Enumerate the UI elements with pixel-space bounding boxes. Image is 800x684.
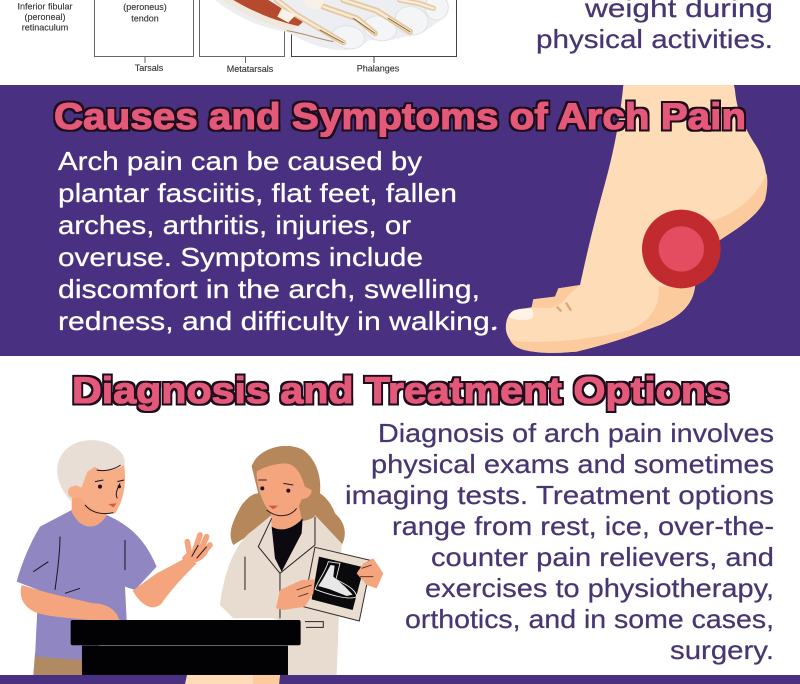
diagram label: tendon: (peroneus) (123, 2, 167, 12)
small white dot (494, 326, 496, 330)
anatomy diagram: foot bones (17, 0, 456, 74)
text block: causes and symptoms (58, 146, 498, 336)
diagram label: retinaculum: retinaculum (22, 22, 68, 32)
text block: causes and symptoms: redness, and difficulty in walking. (58, 306, 498, 336)
doctor figure (220, 446, 383, 675)
text block: diagnosis and treatment: exercises to physiotherapy, (425, 573, 774, 603)
text block: causes and symptoms: Arch pain can be caused by (58, 146, 422, 176)
text block: diagnosis and treatment: surgery. (670, 635, 774, 665)
text block: arch function (end): physical activities. (536, 24, 773, 54)
black redaction block (71, 620, 301, 675)
panel: causes and symptoms (0, 85, 800, 356)
panel: anatomy section background (0, 0, 800, 85)
pain spot inner (659, 226, 704, 272)
text block: diagnosis and treatment: counter pain relievers, and (431, 542, 774, 572)
heading: causes and symptoms: Causes and Symptoms of Arch Pain (54, 96, 746, 137)
diagram label: retinaculum (17, 2, 73, 32)
axis label: phalanges: Phalanges (357, 64, 400, 74)
text block: arch function (end) (536, 0, 773, 54)
text block: diagnosis and treatment: physical exams and sometimes (371, 449, 774, 479)
panel: diagnosis and treatment (0, 356, 800, 675)
panel: bottom band (0, 675, 800, 684)
diagram label: tendon: tendon (131, 14, 159, 24)
text block: diagnosis and treatment: Diagnosis of arch pain involves (378, 418, 774, 448)
pain spot outer ring (642, 210, 721, 288)
axis label: tarsals: Tarsals (135, 63, 164, 73)
text block: diagnosis and treatment: orthotics, and in some cases, (405, 604, 774, 634)
illustration: foot with pain spot (506, 85, 767, 353)
text block: diagnosis and treatment: range from rest, ice, over-the- (392, 511, 774, 541)
patient figure (17, 440, 210, 675)
next foot illustration top (185, 675, 280, 684)
diagram label: tendon (123, 2, 167, 24)
text block: causes and symptoms: arches, arthritis, injuries, or (58, 210, 411, 240)
text block: causes and symptoms: discomfort in the arch, swelling, (58, 274, 480, 304)
text block: causes and symptoms: overuse. Symptoms include (58, 242, 423, 272)
illustration: patient and doctor (17, 440, 383, 675)
heading: diagnosis and treatment: Diagnosis and Treatment Options (72, 370, 729, 411)
text block: diagnosis and treatment: imaging tests. Treatment options (345, 480, 774, 510)
text block: causes and symptoms: plantar fasciitis, flat feet, fallen (58, 178, 457, 208)
x-ray tablet (303, 547, 372, 621)
diagram label: retinaculum: (peroneal) (24, 12, 66, 22)
text block: diagnosis and treatment (345, 418, 774, 665)
axis label: metatarsals: Metatarsals (227, 64, 274, 74)
diagram bracket boxes (94, 0, 456, 63)
diagram label: retinaculum: Inferior fibular (17, 2, 73, 12)
foot illustration with toes (215, 0, 448, 51)
